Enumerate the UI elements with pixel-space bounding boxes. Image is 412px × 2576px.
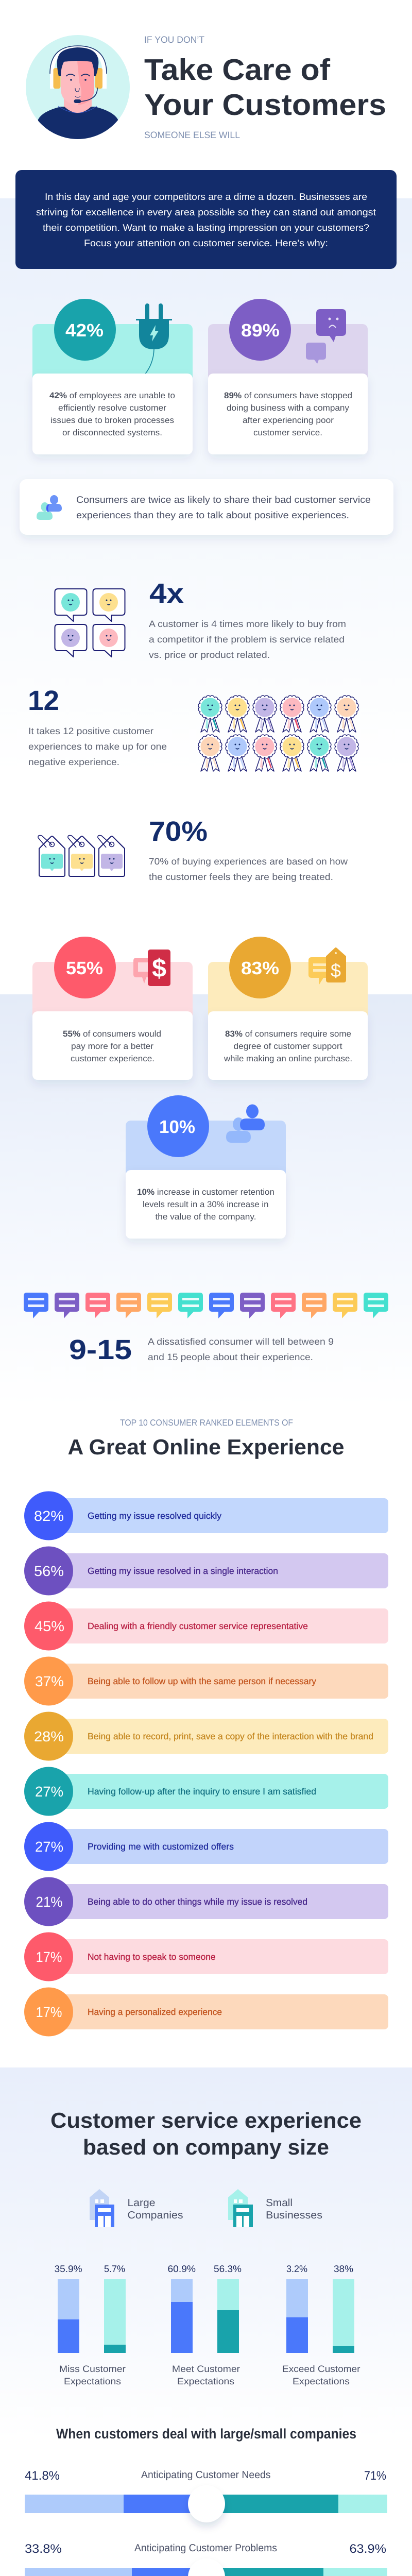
group: meet customer expectations: 56.3% xyxy=(214,2263,242,2274)
group: meet customer expectations: Expectations xyxy=(177,2376,234,2386)
slider: anticipating customer problems: Anticipating Customer Problems xyxy=(134,2543,277,2554)
slider: anticipating customer problems xyxy=(25,2542,387,2576)
panel: 83% consumers: while making an online purchase. xyxy=(224,1054,352,1063)
group: miss customer expectations xyxy=(55,2263,126,2386)
tagline: SOMEONE ELSE WILL xyxy=(144,130,240,140)
legend: small businesses: Businesses xyxy=(266,2210,322,2221)
row: 28%: Being able to record, print, save a copy of the interaction with the brand xyxy=(88,1731,373,1741)
stat: 4x: 4x xyxy=(149,578,184,609)
row: 37%: Being able to follow up with the same person if necessary xyxy=(88,1676,316,1686)
group: miss customer expectations: 5.7% xyxy=(104,2263,125,2274)
group: exceed customer expectations xyxy=(282,2263,360,2386)
group: miss customer expectations: Miss Customer xyxy=(59,2364,126,2374)
panel: intro: their competition. Want to make a lasting impression on your customers? xyxy=(43,222,369,233)
panel: 89% consumers: 89% of consumers have stopped xyxy=(224,391,352,400)
icon: chat with price tag: $ xyxy=(331,960,341,981)
stat: 12: 12 xyxy=(28,685,59,716)
stat: 4x: a competitor if the problem is service related xyxy=(149,634,345,645)
callout: twice as likely: experiences than they are to talk about positive experiences. xyxy=(76,510,349,520)
row: 27% follow-up: Having follow-up after the inquiry to ensure I am satisfied xyxy=(88,1786,316,1797)
panel: 10% retention: levels result in a 30% increase in xyxy=(143,1200,269,1209)
panel: 10% retention: the value of the company. xyxy=(156,1212,256,1222)
row: 37%: 37% xyxy=(35,1673,64,1689)
panel: 55% consumers: pay more for a better xyxy=(71,1042,154,1051)
group: exceed customer expectations: Exceed Customer xyxy=(282,2364,360,2374)
panel: 83% consumers: 83% xyxy=(241,958,279,978)
row: 27% offers: 27% xyxy=(35,1839,63,1855)
heading: a great online experience: A Great Online Experience xyxy=(68,1435,344,1459)
heading: company size: Customer service experience xyxy=(50,2108,362,2132)
panel: 42% employees: issues due to broken processes xyxy=(50,416,174,425)
row: 17% personalized: Having a personalized experience xyxy=(88,2007,222,2017)
row: 27% offers xyxy=(24,1822,388,1871)
icon: teal buildings xyxy=(228,2189,253,2227)
stat: 12: experiences to make up for one xyxy=(28,741,167,752)
row: 27% follow-up xyxy=(24,1767,388,1816)
row: 21%: Being able to do other things while my issue is resolved xyxy=(88,1896,307,1907)
panel: intro xyxy=(15,170,397,269)
icon: sad chat bubbles xyxy=(306,309,346,364)
row: 28%: 28% xyxy=(34,1728,64,1744)
group: meet customer expectations xyxy=(168,2263,242,2386)
slider: anticipating customer needs: 41.8% xyxy=(25,2469,60,2483)
row: 21%: 21% xyxy=(36,1894,63,1910)
callout: twice as likely: Consumers are twice as likely to share their bad customer service xyxy=(76,494,371,505)
panel: 83% consumers xyxy=(208,937,368,1080)
icon: plug xyxy=(136,303,172,375)
stat: 9-15: A dissatisfied consumer will tell between 9 xyxy=(148,1336,334,1347)
panel: 89% consumers: after experiencing poor xyxy=(243,416,334,425)
group: exceed customer expectations: Expectations xyxy=(293,2376,350,2386)
stat: 4x xyxy=(55,578,346,660)
heading: company size xyxy=(50,2108,362,2159)
callout: twice as likely xyxy=(20,479,393,535)
panel: 42% employees: 42% xyxy=(65,320,104,341)
panel: 42% employees: efficiently resolve customer xyxy=(58,403,167,413)
stat: 70%: the customer feels they are being treated. xyxy=(149,872,333,882)
panel: 89% consumers: 89% xyxy=(241,320,280,341)
icon: support agent portrait xyxy=(26,35,130,144)
row: 27% offers: Providing me with customized offers xyxy=(88,1841,234,1852)
slider: anticipating customer needs: 71% xyxy=(364,2469,386,2483)
icon: row of twelve speech bubbles xyxy=(24,1293,388,1318)
slider: anticipating customer needs xyxy=(25,2469,387,2522)
row: 17% speak: 17% xyxy=(36,1949,62,1965)
slider: anticipating customer problems: 33.8% xyxy=(25,2542,62,2556)
row: 27% follow-up: 27% xyxy=(35,1784,63,1800)
eyebrow text: IF YOU DON’T xyxy=(144,35,204,45)
header xyxy=(26,35,386,144)
panel: 89% consumers xyxy=(208,299,368,454)
stat: 9-15: and 15 people about their experience. xyxy=(148,1352,313,1362)
row: 21% xyxy=(24,1877,388,1926)
row: 17% speak: Not having to speak to someone xyxy=(88,1952,215,1962)
row: 28% xyxy=(24,1711,388,1761)
title: Your Customers xyxy=(144,88,386,122)
row: 56%: Getting my issue resolved in a single interaction xyxy=(88,1566,278,1576)
panel: 55% consumers xyxy=(32,937,193,1080)
stat: 70% xyxy=(38,816,348,882)
stat: 12: It takes 12 positive customer xyxy=(28,726,153,736)
comparison sliders xyxy=(25,2469,387,2576)
group: miss customer expectations: 35.9% xyxy=(55,2263,82,2274)
icon: twelve rosettes xyxy=(198,696,358,771)
icon: chat with price tag xyxy=(308,947,346,985)
heading: company size: based on company size xyxy=(83,2135,329,2159)
title: Take Care of xyxy=(144,53,331,87)
icon: chat with dollar: $ xyxy=(152,954,166,982)
group: meet customer expectations: 60.9% xyxy=(168,2263,196,2274)
group: exceed customer expectations: 3.2% xyxy=(286,2263,307,2274)
stat: 4x: A customer is 4 times more likely to buy from xyxy=(149,619,346,629)
group: miss customer expectations: Expectations xyxy=(64,2376,121,2386)
legend: large companies: Companies xyxy=(128,2210,183,2221)
panel: 42% employees xyxy=(32,299,193,454)
panel: 83% consumers: degree of customer support xyxy=(234,1042,342,1051)
group: exceed customer expectations: 38% xyxy=(334,2263,353,2274)
stat: 9-15 xyxy=(69,1334,334,1365)
group: meet customer expectations: Meet Customer xyxy=(172,2364,240,2374)
panel: intro: In this day and age your competitors are a dime a dozen. Businesses are xyxy=(45,191,367,202)
row: 37% xyxy=(24,1657,388,1705)
legend: small businesses xyxy=(228,2189,322,2227)
panel: 55% consumers: 55% of consumers would xyxy=(63,1029,161,1039)
bar chart: expectations xyxy=(55,2263,360,2386)
panel: 55% consumers: customer experience. xyxy=(71,1054,154,1063)
row: 17% personalized xyxy=(24,1988,388,2036)
icon: two people xyxy=(226,1105,265,1143)
heading: a great online experience xyxy=(68,1418,344,1459)
row: 82%: 82% xyxy=(34,1508,64,1524)
legend: large companies: Large xyxy=(128,2197,156,2209)
stat: 70%: 70% xyxy=(149,816,208,847)
panel: 55% consumers: 55% xyxy=(66,958,103,978)
icon: four smiley chat bubbles xyxy=(55,589,125,657)
icon: chat with dollar xyxy=(133,950,170,986)
panel: 42% employees: 42% of employees are unable to xyxy=(49,391,175,400)
panel: intro: Focus your attention on customer service. Here’s why: xyxy=(84,238,328,248)
stat: 70%: 70% of buying experiences are based on how xyxy=(149,856,348,867)
stat: 12 xyxy=(28,685,358,771)
row: 82%: Getting my issue resolved quickly xyxy=(88,1511,221,1521)
slider: anticipating customer needs: Anticipating Customer Needs xyxy=(141,2469,271,2481)
panel: 42% employees: or disconnected systems. xyxy=(62,428,162,437)
panel: intro: striving for excellence in every area possible so they can stand out amongst xyxy=(36,207,376,217)
panel: 10% retention: 10% increase in customer retention xyxy=(137,1188,274,1197)
stat: 9-15: 9-15 xyxy=(69,1334,132,1365)
panel: 10% retention xyxy=(126,1095,286,1239)
legend: large companies xyxy=(90,2189,183,2227)
row: 45%: Dealing with a friendly customer service representative xyxy=(88,1621,308,1631)
row: 56% xyxy=(24,1547,388,1595)
panel: 83% consumers: 83% of consumers require some xyxy=(225,1029,351,1039)
row: 17% personalized: 17% xyxy=(36,2004,62,2020)
icon: two people xyxy=(37,495,62,520)
row: 45% xyxy=(24,1601,388,1651)
legend: small businesses: Small xyxy=(266,2197,293,2209)
panel: 89% consumers: doing business with a company xyxy=(227,403,350,413)
stat: 12: negative experience. xyxy=(28,757,119,767)
heading: large/small companies: When customers deal with large/small companies xyxy=(56,2426,356,2442)
panel: 10% retention: 10% xyxy=(159,1117,195,1137)
title xyxy=(144,53,386,122)
icon: three price tags xyxy=(38,836,125,876)
icon: blue buildings xyxy=(90,2189,114,2227)
row: 82% xyxy=(24,1491,388,1540)
slider: anticipating customer problems: 63.9% xyxy=(349,2542,386,2556)
stat: 4x: vs. price or product related. xyxy=(149,650,270,660)
row: 45%: 45% xyxy=(35,1618,64,1634)
ranked list xyxy=(24,1491,388,2036)
row: 17% speak xyxy=(24,1932,388,1981)
heading: a great online experience: TOP 10 CONSUMER RANKED ELEMENTS OF xyxy=(120,1418,293,1428)
panel: 89% consumers: customer service. xyxy=(253,428,322,437)
row: 56%: 56% xyxy=(34,1563,64,1579)
